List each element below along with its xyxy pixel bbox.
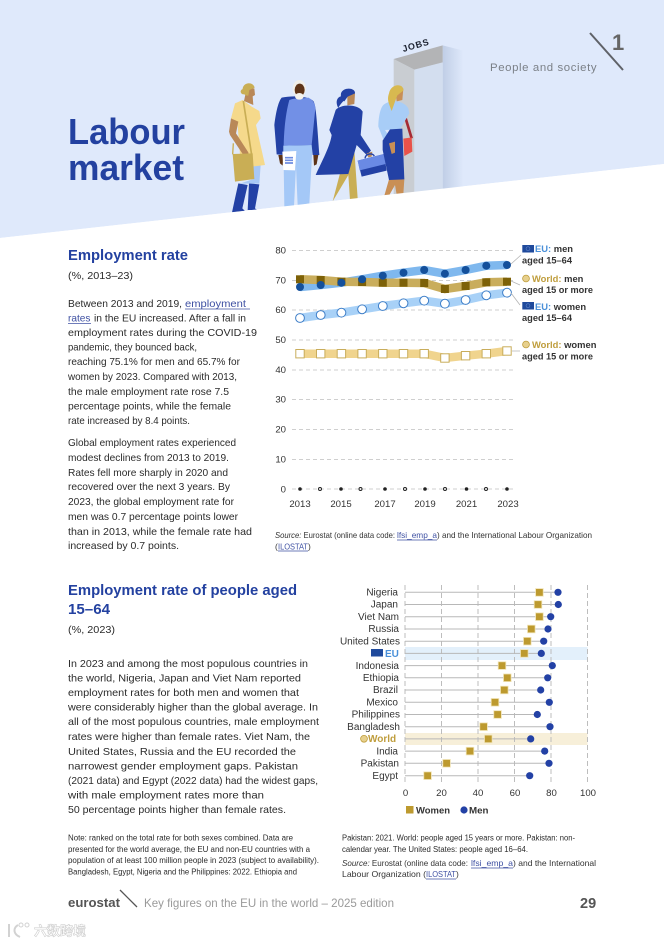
- text block: populous countries paragraph: [67, 659, 319, 816]
- source: employment rate chart: ) and the International Labour Organization: [437, 530, 592, 540]
- source: employment rate chart: (: [275, 542, 278, 552]
- x axis labels: 100: [580, 788, 596, 799]
- legend: EU men: EU: men: [535, 243, 573, 254]
- series: world men: [296, 275, 511, 293]
- text block: populous countries paragraph: In 2023 and among the most populous countries in: [68, 659, 308, 670]
- text block: populous countries paragraph: were considerably higher than the global average. In: [67, 702, 318, 714]
- text block: EU employment paragraph: percentage points, while the female: [68, 402, 231, 412]
- x axis labels: 0: [403, 788, 408, 799]
- text block: EU employment paragraph: the male employment rate rose 7.5: [68, 387, 229, 398]
- heading: employment rate of people aged 15-64: [68, 583, 297, 618]
- note: Bangladesh, Egypt, Nigeria and the Philippines: 2022. Ethiopia and: [68, 868, 297, 876]
- country labels: Pakistan: [361, 758, 399, 770]
- line chart: employment rate 2013-2023: 30: [275, 394, 286, 406]
- text block: EU employment paragraph: Between 2013 and 2019,: [68, 299, 182, 310]
- text block: EU employment paragraph: in the EU increased. After a fall in: [94, 314, 246, 324]
- source: employment rate chart: Source: Eurostat (online data code:: [275, 530, 395, 540]
- text block: EU employment paragraph: [67, 299, 257, 427]
- line chart: employment rate 2013-2023: [275, 246, 521, 510]
- text block: global employment paragraph: recovered over the next 3 years. By: [68, 482, 231, 493]
- country labels: Japan: [371, 600, 398, 611]
- text block: populous countries paragraph: the world, Nigeria, Japan and Viet Nam reported: [68, 674, 301, 684]
- source: employment rate chart: lfsi_emp_a: [397, 530, 437, 540]
- icon: woman with light blouse and red bag: [378, 85, 412, 196]
- country labels: World: [368, 734, 396, 745]
- country labels: United States: [340, 636, 400, 647]
- text block: populous countries paragraph: United States, Russia and the EU recorded the: [68, 747, 296, 758]
- source: country chart: Labour Organization (: [342, 869, 426, 879]
- text block: global employment paragraph: Global employment rates experienced: [68, 438, 236, 449]
- source: country chart: ) and the International: [513, 858, 596, 868]
- footer: Key figures on the EU in the world – 2025 edition: [144, 896, 394, 910]
- line chart: employment rate 2013-2023: 2019: [414, 499, 436, 510]
- chapter marker: People and society: [490, 62, 597, 74]
- country labels: Viet Nam: [358, 612, 399, 623]
- note: population of at least 100 million people in 2023 (subject to availability).: [68, 856, 319, 865]
- text block: EU employment paragraph: pandemic, they bounced back,: [68, 342, 197, 354]
- footer: [68, 890, 596, 912]
- country labels: Philippines: [352, 710, 400, 721]
- legend: world men: [522, 273, 593, 295]
- legend: world women: aged 15 or more: [522, 350, 593, 362]
- line chart: employment rate 2013-2023: 70: [275, 276, 286, 286]
- line chart: employment rate 2013-2023: 2013: [289, 499, 311, 510]
- country labels: Ethiopia: [363, 673, 399, 684]
- heading: employment rate of people aged 15-64: Employment rate of people aged: [68, 583, 297, 599]
- line chart: employment rate 2013-2023: 2023: [497, 499, 519, 510]
- legend: EU men: [522, 243, 573, 266]
- country labels: Mexico: [366, 697, 398, 708]
- source: employment rate chart: ): [308, 542, 311, 552]
- country labels: Egypt: [372, 771, 398, 782]
- icon: jobs door: [394, 37, 463, 198]
- country labels: India: [376, 746, 398, 757]
- country labels: Nigeria: [366, 588, 398, 598]
- icon: older man with document: [274, 80, 319, 207]
- heading: employment rate of people aged 15-64: 15–64: [68, 602, 110, 618]
- icon: jobs door: JOBS: [401, 37, 431, 54]
- text block: populous countries paragraph: (2021 data) and Egypt (2022 data) had the widest gaps,: [68, 776, 318, 787]
- note: presented for the world average, the EU and non-EU countries with a: [68, 845, 311, 854]
- source: country chart: [342, 858, 596, 879]
- watermark: 六数跨境: [34, 920, 86, 940]
- text block: global employment paragraph: increased by 0.7 points.: [68, 541, 179, 552]
- country labels: Indonesia: [356, 661, 399, 672]
- text block: EU employment paragraph: employment: [185, 299, 246, 310]
- chart legend: Men: [469, 806, 489, 816]
- icon: woman with blue coat and briefcase: [316, 89, 387, 201]
- series: EU men band: [300, 265, 507, 287]
- x axis labels: 40: [473, 788, 483, 799]
- legend: EU women: [522, 301, 586, 323]
- text block: populous countries paragraph: narrowest gender employment gaps. Pakistan: [68, 762, 298, 772]
- text block: populous countries paragraph: with male employment rates more than: [67, 790, 264, 802]
- chart legend: [406, 806, 489, 816]
- text block: global employment paragraph: modest declines from 2013 to 2019.: [68, 453, 229, 464]
- unit: employment rate: (%, 2013–23): [68, 271, 133, 282]
- women markers: [424, 589, 543, 780]
- legend: EU women: EU: women: [535, 301, 586, 312]
- header background: [0, 0, 664, 238]
- men markers: [526, 589, 562, 779]
- white band below the diagonal: [0, 164, 664, 260]
- line chart: employment rate 2013-2023: 20: [275, 424, 286, 436]
- country labels: EU: [385, 649, 399, 660]
- source: employment rate chart: ILOSTAT: [278, 542, 308, 552]
- watermark: [9, 920, 86, 940]
- note: Note: ranked on the total rate for both sexes combined. Data are: [68, 834, 294, 842]
- source: country chart: Source: Eurostat (online data code:: [342, 858, 468, 868]
- text block: populous countries paragraph: 50 percentage points higher than female rates.: [68, 805, 286, 816]
- line chart: employment rate 2013-2023: 10: [275, 454, 286, 466]
- icon: woman with yellow dress and bag: [229, 83, 265, 212]
- text block: global employment paragraph: men was 0.7 percentage points lower: [68, 512, 239, 523]
- title: [68, 111, 185, 188]
- dumbbell chart: employment by country: [340, 585, 596, 816]
- text block: EU employment paragraph: women by 2023. Compared with 2013,: [67, 372, 237, 383]
- line chart: employment rate 2013-2023: 50: [275, 335, 286, 346]
- line chart: employment rate 2013-2023: 0: [281, 484, 286, 496]
- text block: EU employment paragraph: rates: [68, 314, 90, 324]
- unit: 2023: (%, 2023): [68, 625, 115, 636]
- series: EU women: [296, 288, 511, 322]
- note: calendar year. The United States: people aged 16–64.: [342, 845, 528, 854]
- text block: global employment paragraph: Rates fell more sharply in 2020 and: [68, 468, 228, 479]
- source: employment rate chart: [275, 530, 592, 552]
- legend connectors: [511, 255, 521, 351]
- title: market: [68, 147, 184, 188]
- line chart: employment rate 2013-2023: 2015: [330, 499, 352, 510]
- line chart: employment rate 2013-2023: 2017: [374, 499, 396, 510]
- line chart: employment rate 2013-2023: 60: [275, 305, 286, 316]
- footer: 29: [580, 896, 596, 912]
- text block: populous countries paragraph: rates were higher than female rates. Viet Nam, the: [68, 732, 310, 743]
- source: country chart: ): [456, 869, 459, 879]
- x axis labels: 60: [510, 788, 520, 799]
- legend: world women: [522, 339, 597, 362]
- title: Labour: [68, 111, 185, 152]
- x axis labels: 20: [436, 788, 447, 799]
- text block: populous countries paragraph: all of the most populous countries, male employment: [68, 717, 319, 728]
- source: country chart: ILOSTAT: [426, 869, 456, 879]
- text block: EU employment paragraph: reaching 75.1% for men and 65.7% for: [68, 357, 241, 368]
- country labels: [340, 588, 400, 782]
- legend: EU women: aged 15–64: [522, 312, 573, 323]
- source: country chart: lfsi_emp_a: [471, 858, 513, 868]
- line chart: employment rate 2013-2023: 2021: [456, 499, 477, 510]
- text block: populous countries paragraph: employment rates for both men and women that: [68, 688, 299, 699]
- footer: eurostat: [68, 895, 121, 910]
- line chart: employment rate 2013-2023: 40: [275, 365, 286, 376]
- country labels: Bangladesh: [347, 722, 400, 733]
- text block: EU employment paragraph: rate increased by 8.4 points.: [68, 416, 190, 427]
- series: world women: [296, 347, 511, 362]
- chapter marker: [490, 30, 624, 74]
- heading: employment rate: Employment rate: [68, 248, 188, 264]
- country labels: Brazil: [373, 685, 398, 696]
- legend: world women: World: women: [532, 339, 597, 350]
- x axis labels: [403, 788, 596, 799]
- text block: EU employment paragraph: employment rates during the COVID-19: [68, 328, 257, 339]
- chapter marker: 1: [612, 30, 624, 55]
- legend: world men: aged 15 or more: [522, 284, 593, 295]
- note: [68, 834, 575, 876]
- text block: global employment paragraph: 2023, the global employment rate for: [68, 497, 235, 508]
- line chart: employment rate 2013-2023: 80: [275, 246, 286, 256]
- country labels: Russia: [368, 624, 399, 635]
- x axis labels: 80: [546, 788, 557, 799]
- note: Pakistan: 2021. World: people aged 15 years or more. Pakistan: non-: [342, 834, 575, 842]
- text block: global employment paragraph: than in 2013, while the female rate had: [68, 527, 252, 538]
- chart legend: Women: [416, 806, 450, 816]
- legend: EU men: aged 15–64: [522, 254, 573, 266]
- legend: world men: World: men: [532, 273, 584, 284]
- series: EU men markers: [296, 261, 511, 291]
- text block: global employment paragraph: [68, 438, 252, 552]
